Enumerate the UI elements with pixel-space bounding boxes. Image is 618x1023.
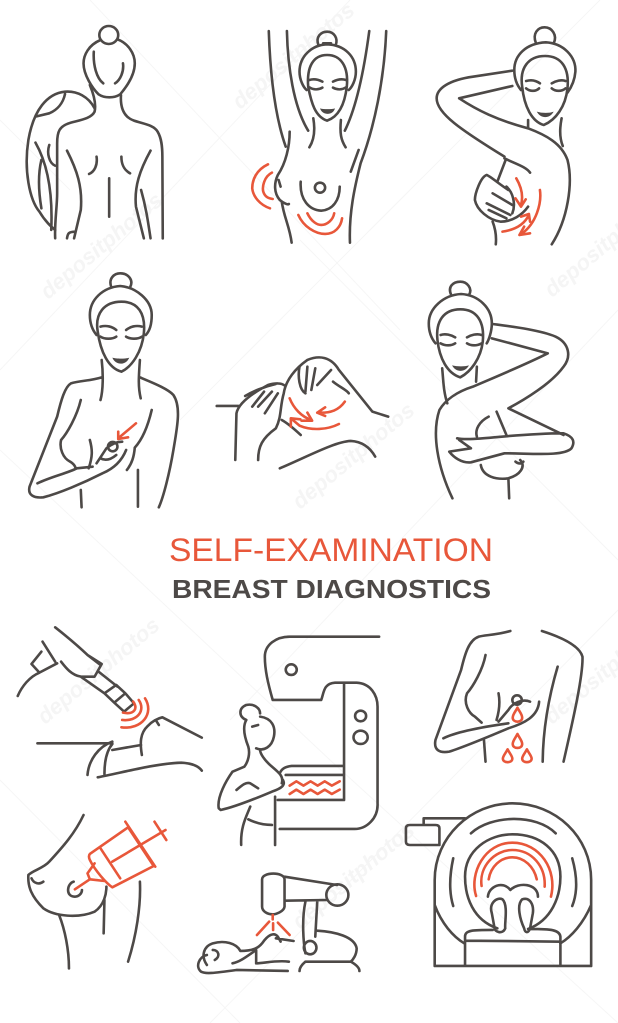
figure: breast biopsy syringe bbox=[28, 815, 166, 968]
figure: woman pressing nipple with red arrow bbox=[29, 273, 178, 507]
heading: self-examination: SELF-EXAMINATION bbox=[169, 532, 493, 568]
figure: woman with raised arms, red vibration arcs bbox=[252, 31, 386, 243]
figure: biopsy machine over lying patient bbox=[198, 874, 359, 973]
figure: two hands palpating, red arrows bbox=[217, 357, 388, 468]
figure: woman from back with raised shoulder bbox=[27, 26, 163, 238]
text: depositphotos bbox=[35, 187, 167, 304]
subheading: breast diagnostics: BREAST DIAGNOSTICS bbox=[172, 574, 491, 604]
text: depositphotos bbox=[287, 817, 419, 934]
figure: woman with arm raised and forearm across chest bbox=[429, 282, 573, 498]
figure: nipple discharge with red drops bbox=[435, 631, 583, 762]
figure: MRI scanner bbox=[406, 803, 591, 966]
figure: ultrasound probe on breast bbox=[18, 627, 202, 777]
text: depositphotos bbox=[32, 612, 164, 729]
figure: woman with arm behind head palpating breast bbox=[437, 27, 575, 244]
text: depositphotos bbox=[287, 397, 419, 514]
text: depositphotos bbox=[227, 0, 359, 114]
figure: mammography machine with woman bbox=[218, 637, 379, 845]
